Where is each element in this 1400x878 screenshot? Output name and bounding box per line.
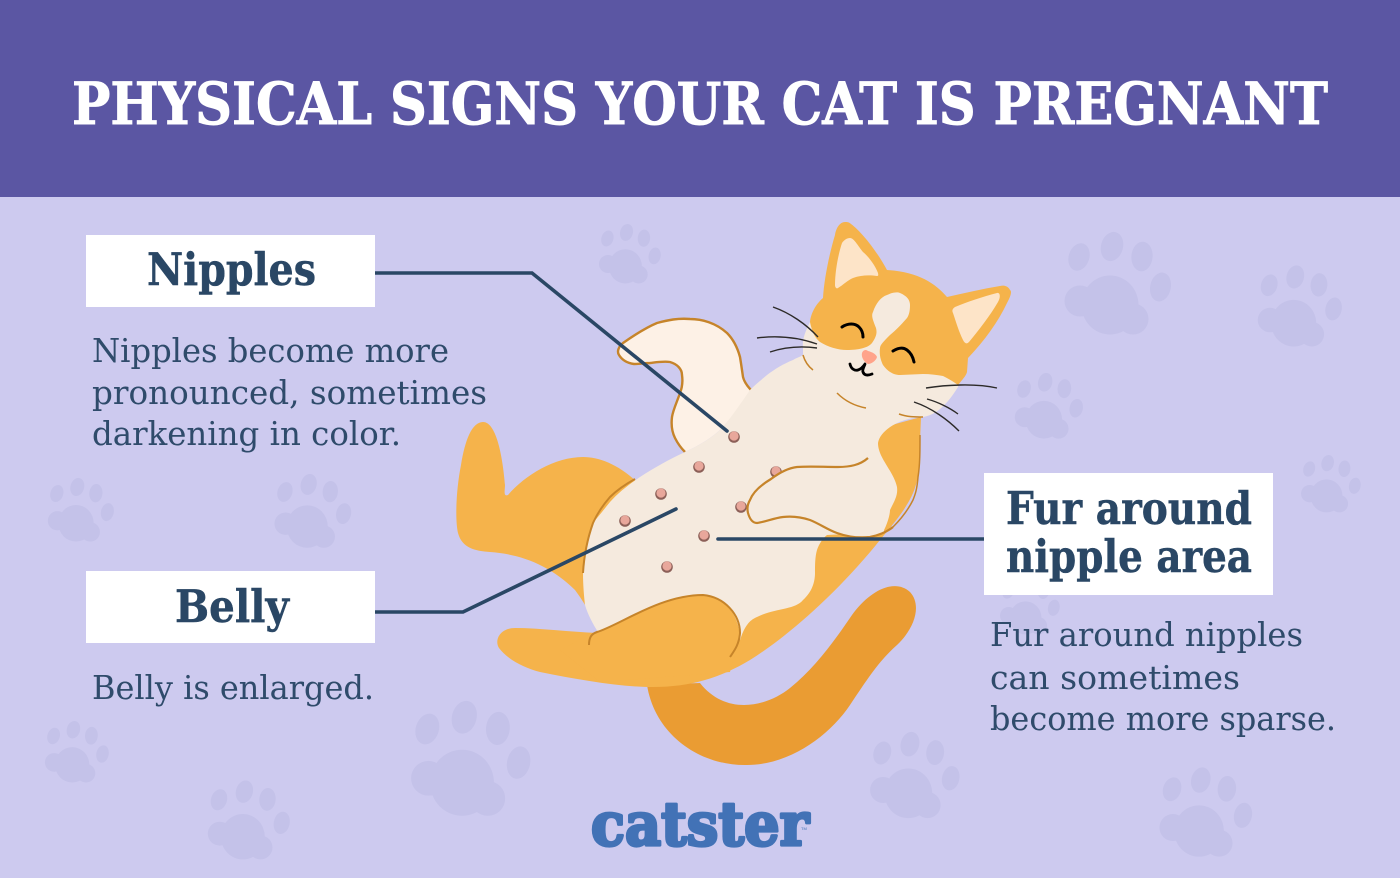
heading: nipples: Nipples	[147, 243, 316, 296]
fur creases	[803, 355, 923, 417]
panel: fur around nipple area	[984, 473, 1273, 595]
belly and chest	[583, 285, 960, 640]
text: fur	[990, 615, 1336, 738]
head and ears	[810, 222, 1011, 385]
heading: fur around nipple area: Fur around	[1006, 482, 1252, 535]
right ear inner	[952, 293, 1000, 343]
panel: belly	[86, 571, 375, 643]
heading: fur around nipple area: nipple area	[1006, 530, 1252, 583]
closed eyes	[842, 324, 914, 362]
inner arm	[747, 458, 885, 537]
text: nipples: darkening in color.	[92, 414, 401, 453]
belly outline	[583, 479, 635, 573]
nipples	[619, 431, 782, 573]
panel: nipples	[86, 235, 375, 307]
tail	[647, 586, 916, 765]
header banner	[0, 0, 1400, 197]
left ear inner	[835, 238, 878, 288]
text: fur: Fur around nipples	[990, 615, 1303, 654]
hind leg outline	[589, 595, 740, 657]
text: nipples: pronounced, sometimes	[92, 373, 487, 412]
heading: fur around nipple area	[1006, 482, 1252, 583]
mouth	[850, 364, 872, 375]
leader line: belly	[375, 509, 676, 612]
leader line: nipples	[375, 273, 727, 431]
logo: catster: catster	[591, 790, 810, 860]
text: nipples	[92, 331, 487, 453]
text: fur: become more sparse.	[990, 699, 1336, 738]
heading: belly: Belly	[175, 580, 291, 633]
illustration: cat	[456, 222, 1011, 765]
leader line: fur	[718, 537, 985, 541]
right body outline	[893, 435, 920, 527]
far arm	[618, 319, 752, 452]
inner arm outline	[747, 458, 893, 537]
text: belly: Belly is enlarged.	[92, 668, 374, 707]
hind leg	[560, 595, 740, 682]
body fur	[456, 417, 921, 687]
text: fur: can sometimes	[990, 658, 1240, 697]
far arm outline	[618, 319, 752, 452]
text: nipples: Nipples become more	[92, 331, 449, 370]
logo: catster: TM	[801, 826, 807, 831]
whiskers	[757, 307, 997, 431]
nose	[862, 350, 877, 364]
